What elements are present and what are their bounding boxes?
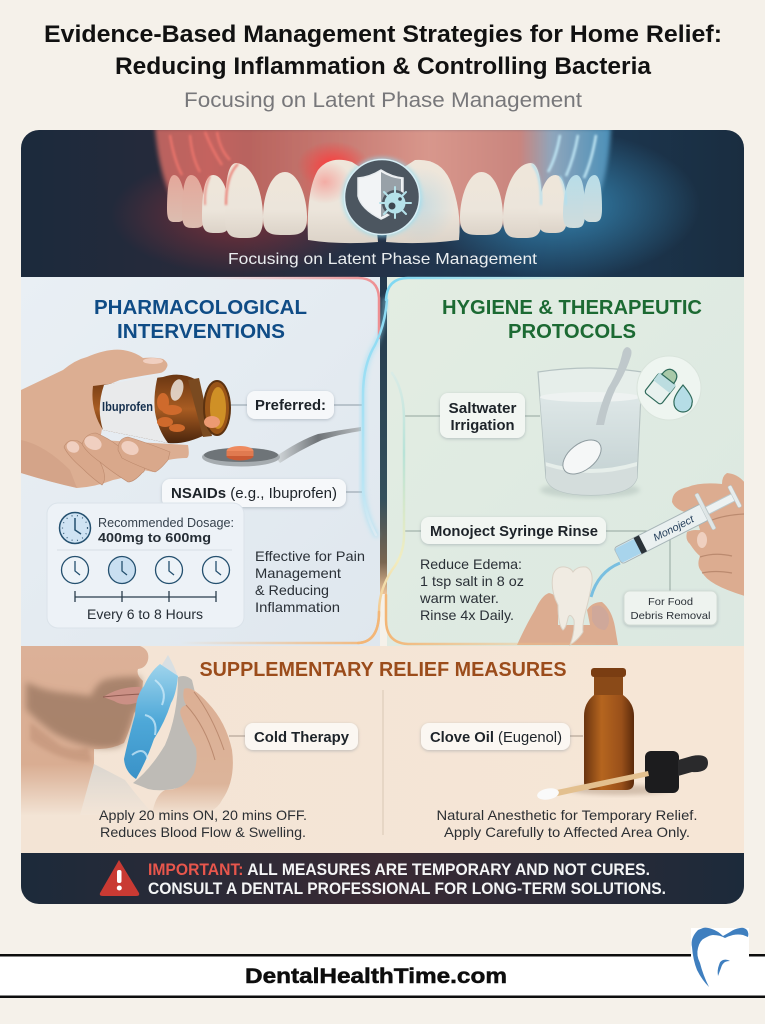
text: cold therapy details: Reduces Blood Flow & Swelling. xyxy=(100,824,306,840)
icon: large clock xyxy=(60,512,90,544)
grey cloth xyxy=(133,676,206,790)
text: effectiveness xyxy=(255,548,365,615)
title: Evidence-Based Management Strategies for Home Relief: xyxy=(44,21,722,48)
neon panel borders xyxy=(194,276,582,646)
hand holding bottle: Ibuprofen xyxy=(102,400,153,414)
label: saltwater irrigation: Saltwater xyxy=(448,401,517,417)
icon: clove oil bottle xyxy=(570,668,670,795)
panel: pharmacological interventions xyxy=(21,277,380,646)
fingers xyxy=(64,433,170,485)
spoon in glass xyxy=(596,347,632,425)
text: effectiveness: Inflammation xyxy=(255,599,340,615)
label: saltwater irrigation: Irrigation xyxy=(450,418,514,434)
icon: spoon with pill xyxy=(202,427,361,466)
icon: syringe and hand xyxy=(591,473,746,597)
text: clove oil details xyxy=(436,807,698,840)
footer bar: DentalHealthTime.com xyxy=(245,965,507,988)
dosage card xyxy=(47,503,244,628)
lips xyxy=(103,687,141,704)
subtitle: Focusing on Latent Phase Management xyxy=(184,89,582,112)
panel: header with teeth xyxy=(21,128,744,280)
text: reduce edema: Rinse 4x Daily. xyxy=(420,607,514,623)
label: nsaids: NSAIDs (e.g., Ibuprofen) xyxy=(171,486,337,502)
heading: PHARMACOLOGICAL xyxy=(94,296,307,319)
label: food debris removal: Debris Removal xyxy=(630,610,710,622)
text: reduce edema: Reduce Edema: xyxy=(420,556,522,572)
text: reduce edema xyxy=(419,556,524,623)
text: cold therapy details xyxy=(99,807,307,840)
timeline xyxy=(75,591,216,602)
heading: PROTOCOLS xyxy=(508,320,636,343)
label: cold therapy: Cold Therapy xyxy=(254,730,349,746)
icon: warning triangle xyxy=(100,860,139,896)
face and neck xyxy=(21,646,148,815)
icon: salt shaker and water drop badge xyxy=(637,356,701,420)
title: Reducing Inflammation & Controlling Bacteria xyxy=(115,53,652,80)
dosage text: Recommended Dosage: xyxy=(98,516,234,530)
label: food debris removal: For Food xyxy=(648,596,693,608)
warning text: CONSULT A DENTAL PROFESSIONAL FOR LONG-TERM SOLUTIONS. xyxy=(148,879,666,898)
warning banner xyxy=(21,853,744,904)
label: monoject syringe rinse xyxy=(421,517,606,544)
icon: glass of saltwater xyxy=(538,347,642,498)
man with cold pack xyxy=(21,646,233,815)
panel: supplementary relief measures xyxy=(21,646,744,853)
tooth glow edges xyxy=(310,163,346,201)
gums xyxy=(155,128,611,225)
heading xyxy=(95,300,306,338)
icon: dosing clocks xyxy=(62,556,230,584)
label: saltwater irrigation xyxy=(440,393,525,438)
connector lines xyxy=(404,416,670,591)
icon: dropper and cotton swab xyxy=(536,751,708,801)
text: effectiveness: Management xyxy=(255,565,341,581)
text: clove oil details: Natural Anesthetic for Temporary Relief. xyxy=(436,807,698,823)
icon: syringe and hand: Monoject xyxy=(651,513,697,544)
icon: hand holding molar tooth xyxy=(517,567,618,645)
stubble xyxy=(26,677,141,748)
text: effectiveness: & Reducing xyxy=(255,582,329,598)
hand on pack xyxy=(152,688,233,815)
dosage card: 400mg to 600mg xyxy=(98,530,211,545)
main card xyxy=(21,128,746,904)
icon: red inflammation glow xyxy=(302,144,364,180)
text: clove oil details: Apply Carefully to Affected Area Only. xyxy=(444,824,690,840)
text: effectiveness: Effective for Pain xyxy=(255,548,365,564)
heading xyxy=(443,300,702,338)
panel: hygiene and therapeutic protocols xyxy=(387,277,746,646)
label: nsaids xyxy=(162,479,346,507)
heading: INTERVENTIONS xyxy=(117,320,285,343)
caption: Focusing on Latent Phase Management xyxy=(228,251,538,268)
heading: SUPPLEMENTARY RELIEF MEASURES xyxy=(200,659,566,681)
warning text: IMPORTANT: ALL MEASURES ARE TEMPORARY AND NOT CURES. xyxy=(148,860,650,879)
label: food debris removal xyxy=(624,591,717,625)
label: preferred: Preferred: xyxy=(255,398,326,414)
footer bar xyxy=(0,954,765,998)
text: cold therapy details: Apply 20 mins ON, 20 mins OFF. xyxy=(99,807,307,823)
icon: shield and germ badge xyxy=(342,157,422,237)
shirt xyxy=(80,764,154,815)
teeth row xyxy=(167,160,602,243)
warning text xyxy=(148,860,666,898)
icon: ice pack xyxy=(124,664,178,779)
logo: blue tooth xyxy=(691,928,749,987)
heading: HYGIENE & THERAPEUTIC xyxy=(442,296,702,319)
dosage card: Every 6 to 8 Hours xyxy=(87,607,203,622)
hand holding bottle xyxy=(21,350,230,488)
label: monoject syringe rinse: Monoject Syringe Rinse xyxy=(430,524,598,540)
text: reduce edema: warm water. xyxy=(419,590,499,606)
label: clove oil xyxy=(421,723,570,750)
label: clove oil: Clove Oil (Eugenol) xyxy=(430,730,562,746)
icon: ibuprofen bottle xyxy=(92,375,230,443)
label: preferred xyxy=(247,391,334,419)
label: cold therapy xyxy=(245,723,358,750)
text: reduce edema: 1 tsp salt in 8 oz xyxy=(420,573,524,589)
title xyxy=(44,21,722,80)
connector lines xyxy=(230,405,362,492)
center divider strip xyxy=(380,277,387,594)
